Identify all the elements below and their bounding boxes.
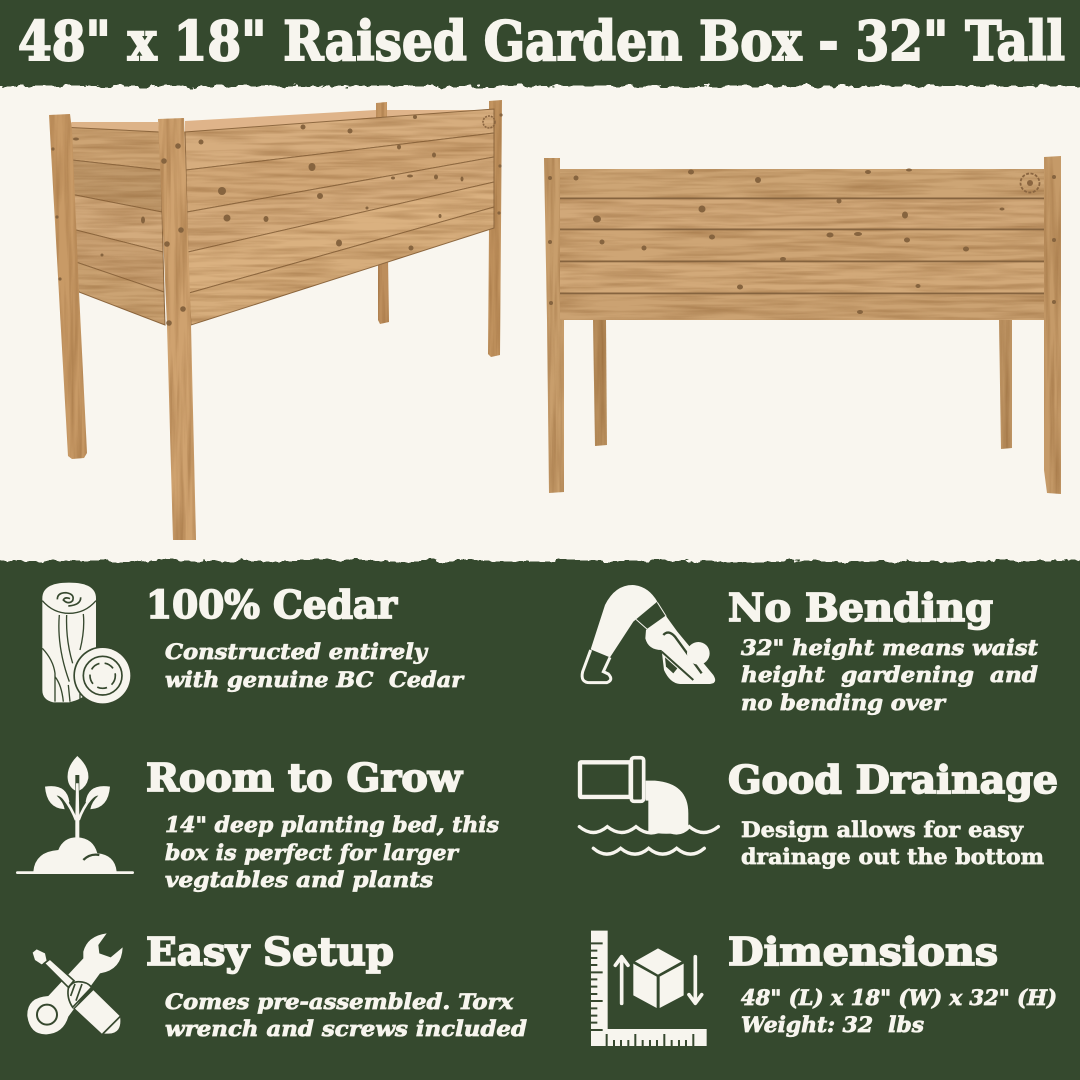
long front panel [185, 109, 494, 325]
icon: ruler and cube [591, 931, 707, 1046]
back post and right post [376, 100, 502, 357]
description [165, 989, 527, 1041]
description: Design allows for easy [741, 817, 1024, 842]
description: Weight: 32 lbs [741, 1012, 924, 1037]
heading: Easy Setup [146, 929, 394, 974]
feature: No Bending [582, 585, 1038, 715]
feature: Room to Grow [16, 755, 499, 892]
icon: drain pipe over water [579, 758, 718, 854]
description: with genuine BC Cedar [165, 667, 465, 692]
description [741, 635, 1038, 715]
front planks [560, 169, 1044, 320]
product photo: angled view of cedar box [49, 100, 503, 540]
brand stamp [483, 116, 495, 128]
description [165, 812, 499, 892]
left side panel [61, 127, 165, 325]
icon: wrench and screwdriver [27, 933, 123, 1034]
description: drainage out the bottom [741, 844, 1044, 869]
left and front posts [49, 114, 196, 540]
description: 14" deep planting bed, this [165, 812, 499, 837]
knots and screws [548, 168, 1056, 314]
description: height gardening and [741, 662, 1038, 687]
description: Constructed entirely [165, 639, 429, 664]
heading: Good Drainage [728, 757, 1058, 802]
knots and screws [51, 113, 503, 326]
description: 32" height means waist [741, 635, 1038, 660]
product photo: straight-on view of cedar box [544, 156, 1061, 494]
heading: No Bending [728, 585, 993, 630]
side posts [544, 156, 1061, 494]
header band [0, 0, 1080, 86]
description [741, 985, 1057, 1037]
description: no bending over [741, 690, 947, 715]
icon: person bending [582, 585, 715, 684]
description: 48" (L) x 18" (W) x 32" (H) [741, 985, 1057, 1010]
icon: sprout in soil [16, 756, 134, 874]
feature section background [0, 561, 1080, 1080]
description [741, 817, 1044, 869]
description: vegtables and plants [165, 867, 433, 892]
rear legs [593, 320, 1012, 449]
brand stamp [1020, 174, 1040, 192]
heading: Room to Grow [146, 755, 463, 800]
description: wrench and screws included [165, 1016, 527, 1041]
cream photo background [0, 80, 1080, 570]
feature: Easy Setup [27, 929, 527, 1041]
description [165, 639, 465, 692]
feature: Dimensions [591, 929, 1057, 1046]
heading: 100% Cedar [146, 582, 398, 627]
icon: cedar logs [42, 583, 132, 705]
description: box is perfect for larger [165, 840, 460, 865]
interior rim [64, 122, 159, 132]
feature: Good Drainage [579, 757, 1058, 869]
description: Comes pre-assembled. Torx [165, 989, 514, 1014]
feature: 100% Cedar [42, 582, 465, 705]
heading: Dimensions [728, 929, 998, 974]
